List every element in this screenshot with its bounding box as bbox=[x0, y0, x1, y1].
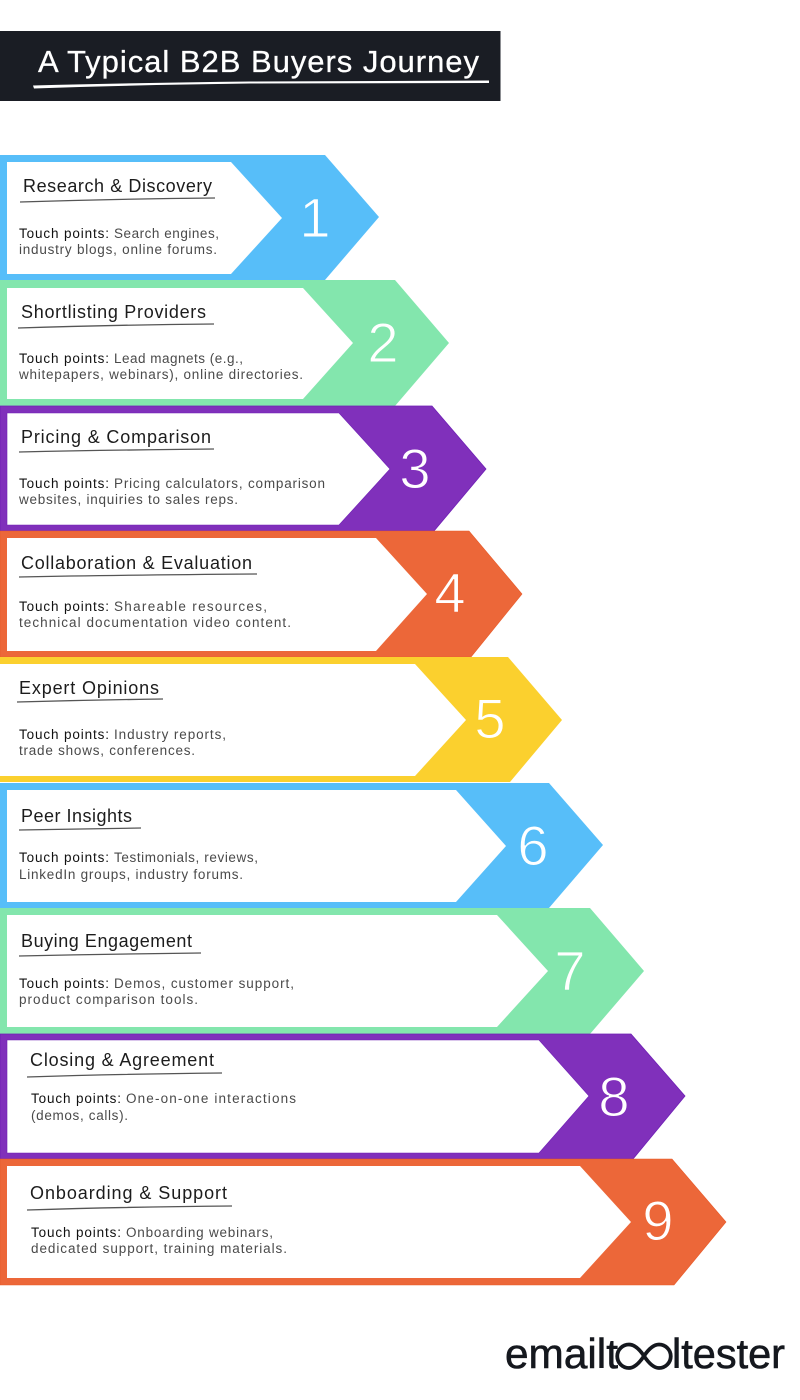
step 4: collaboration and evaluation: Shareable resources, bbox=[114, 599, 267, 614]
step 5: expert opinions: Expert Opinions bbox=[19, 678, 159, 698]
step 9: onboarding and support: Onboarding & Support bbox=[30, 1183, 227, 1203]
icon: infinity loop bbox=[617, 1344, 671, 1368]
step 2: shortlisting providers: whitepapers, webinars), online directories. bbox=[18, 367, 303, 382]
step 3: pricing and comparison: Touch points: bbox=[19, 476, 109, 491]
step 5: expert opinions: trade shows, conferences. bbox=[19, 743, 195, 758]
step 1: research and discovery: Touch points: bbox=[19, 226, 109, 241]
step 3: pricing and comparison bbox=[0, 406, 486, 531]
step 6: peer insights: 6 bbox=[517, 814, 549, 877]
step 7: buying engagement: Buying Engagement bbox=[21, 931, 192, 951]
step 5: expert opinions bbox=[0, 657, 562, 782]
step 6: peer insights: Testimonials, reviews, bbox=[114, 850, 258, 865]
step 1: research and discovery: Search engines, bbox=[114, 226, 219, 241]
step 3: pricing and comparison: 3 bbox=[399, 437, 431, 500]
step 4: collaboration and evaluation: Touch points: bbox=[19, 599, 109, 614]
step 5: expert opinions: Touch points: bbox=[19, 727, 109, 742]
step 3: pricing and comparison: Pricing calculators, comparison bbox=[114, 476, 325, 491]
step 6: peer insights: Touch points: bbox=[19, 850, 109, 865]
step 8: closing and agreement bbox=[0, 1034, 685, 1159]
step 2: shortlisting providers bbox=[0, 280, 449, 406]
step 6: peer insights: LinkedIn groups, industry forums. bbox=[19, 867, 243, 882]
step 2: shortlisting providers: 2 bbox=[367, 311, 399, 374]
step 7: buying engagement: 7 bbox=[554, 939, 586, 1002]
step 7: buying engagement: product comparison tools. bbox=[19, 992, 198, 1007]
title: A Typical B2B Buyers Journey bbox=[38, 44, 480, 79]
step 1: research and discovery: Research & Discovery bbox=[23, 176, 212, 196]
step 9: onboarding and support: 9 bbox=[642, 1189, 674, 1252]
step 2: shortlisting providers: Touch points: bbox=[19, 351, 109, 366]
step 3: pricing and comparison: Pricing & Comparison bbox=[21, 427, 211, 447]
step 8: closing and agreement: One-on-one interactions bbox=[126, 1091, 296, 1106]
step 1: research and discovery bbox=[0, 155, 379, 280]
step 5: expert opinions: Industry reports, bbox=[114, 727, 226, 742]
step 9: onboarding and support: dedicated support, training materials. bbox=[31, 1241, 287, 1256]
step 4: collaboration and evaluation: 4 bbox=[434, 561, 466, 624]
step 7: buying engagement: Demos, customer support, bbox=[114, 976, 294, 991]
step 4: collaboration and evaluation: technical documentation video content. bbox=[19, 615, 291, 630]
logo: emailtooltester bbox=[505, 1330, 785, 1377]
title banner bbox=[0, 31, 500, 101]
step 4: collaboration and evaluation: Collaboration & Evaluation bbox=[21, 553, 252, 573]
step 9: onboarding and support: Touch points: bbox=[31, 1225, 121, 1240]
step 6: peer insights: Peer Insights bbox=[21, 806, 132, 826]
step 8: closing and agreement: Closing & Agreement bbox=[30, 1050, 214, 1070]
step 9: onboarding and support: Onboarding webinars, bbox=[126, 1225, 273, 1240]
step 9: onboarding and support bbox=[0, 1159, 726, 1285]
step 8: closing and agreement: 8 bbox=[598, 1065, 630, 1128]
step 5: expert opinions: 5 bbox=[474, 687, 506, 750]
step 2: shortlisting providers: Shortlisting Providers bbox=[21, 302, 206, 322]
step 7: buying engagement bbox=[0, 908, 644, 1034]
step 1: research and discovery: industry blogs, online forums. bbox=[19, 242, 217, 257]
step 6: peer insights bbox=[0, 783, 603, 908]
step 8: closing and agreement: Touch points: bbox=[31, 1091, 121, 1106]
logo: emailtooltester: emailt bbox=[505, 1330, 618, 1377]
step 7: buying engagement: Touch points: bbox=[19, 976, 109, 991]
step 8: closing and agreement: (demos, calls). bbox=[31, 1108, 128, 1123]
logo: emailtooltester: ltester bbox=[672, 1330, 785, 1377]
step 2: shortlisting providers: Lead magnets (e.g., bbox=[114, 351, 243, 366]
step 3: pricing and comparison: websites, inquiries to sales reps. bbox=[18, 492, 238, 507]
step 4: collaboration and evaluation bbox=[0, 531, 522, 657]
step 1: research and discovery: 1 bbox=[299, 186, 331, 249]
